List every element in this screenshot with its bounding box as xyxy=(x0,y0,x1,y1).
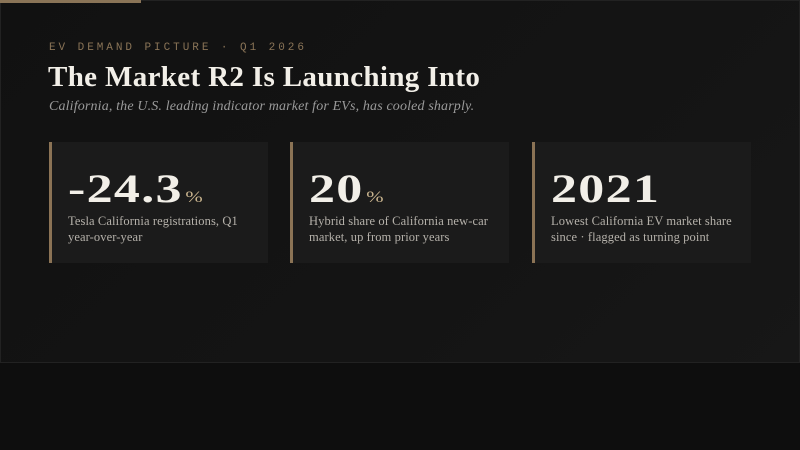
description: market, up from prior years xyxy=(309,230,450,244)
description xyxy=(68,214,238,244)
card: hybrid xyxy=(290,142,509,263)
description: Tesla California registrations, Q1 xyxy=(68,214,238,228)
description xyxy=(309,214,488,244)
description: year-over-year xyxy=(68,230,142,244)
stat: -24.3% xyxy=(68,166,204,211)
stat: 2021 xyxy=(551,166,660,211)
description: since · flagged as turning point xyxy=(551,230,709,244)
stat: 20% xyxy=(309,166,385,211)
card: 2021 xyxy=(532,142,751,263)
title: The Market R2 Is Launching Into xyxy=(48,61,480,93)
progress bar xyxy=(0,0,141,3)
description xyxy=(551,214,732,244)
card: tesla xyxy=(49,142,268,263)
eyebrow: EV DEMAND PICTURE · Q1 2026 xyxy=(49,42,307,54)
description: Hybrid share of California new-car xyxy=(309,214,488,228)
subtitle: California, the U.S. leading indicator market for EVs, has cooled sharply. xyxy=(49,99,474,114)
description: Lowest California EV market share xyxy=(551,214,732,228)
